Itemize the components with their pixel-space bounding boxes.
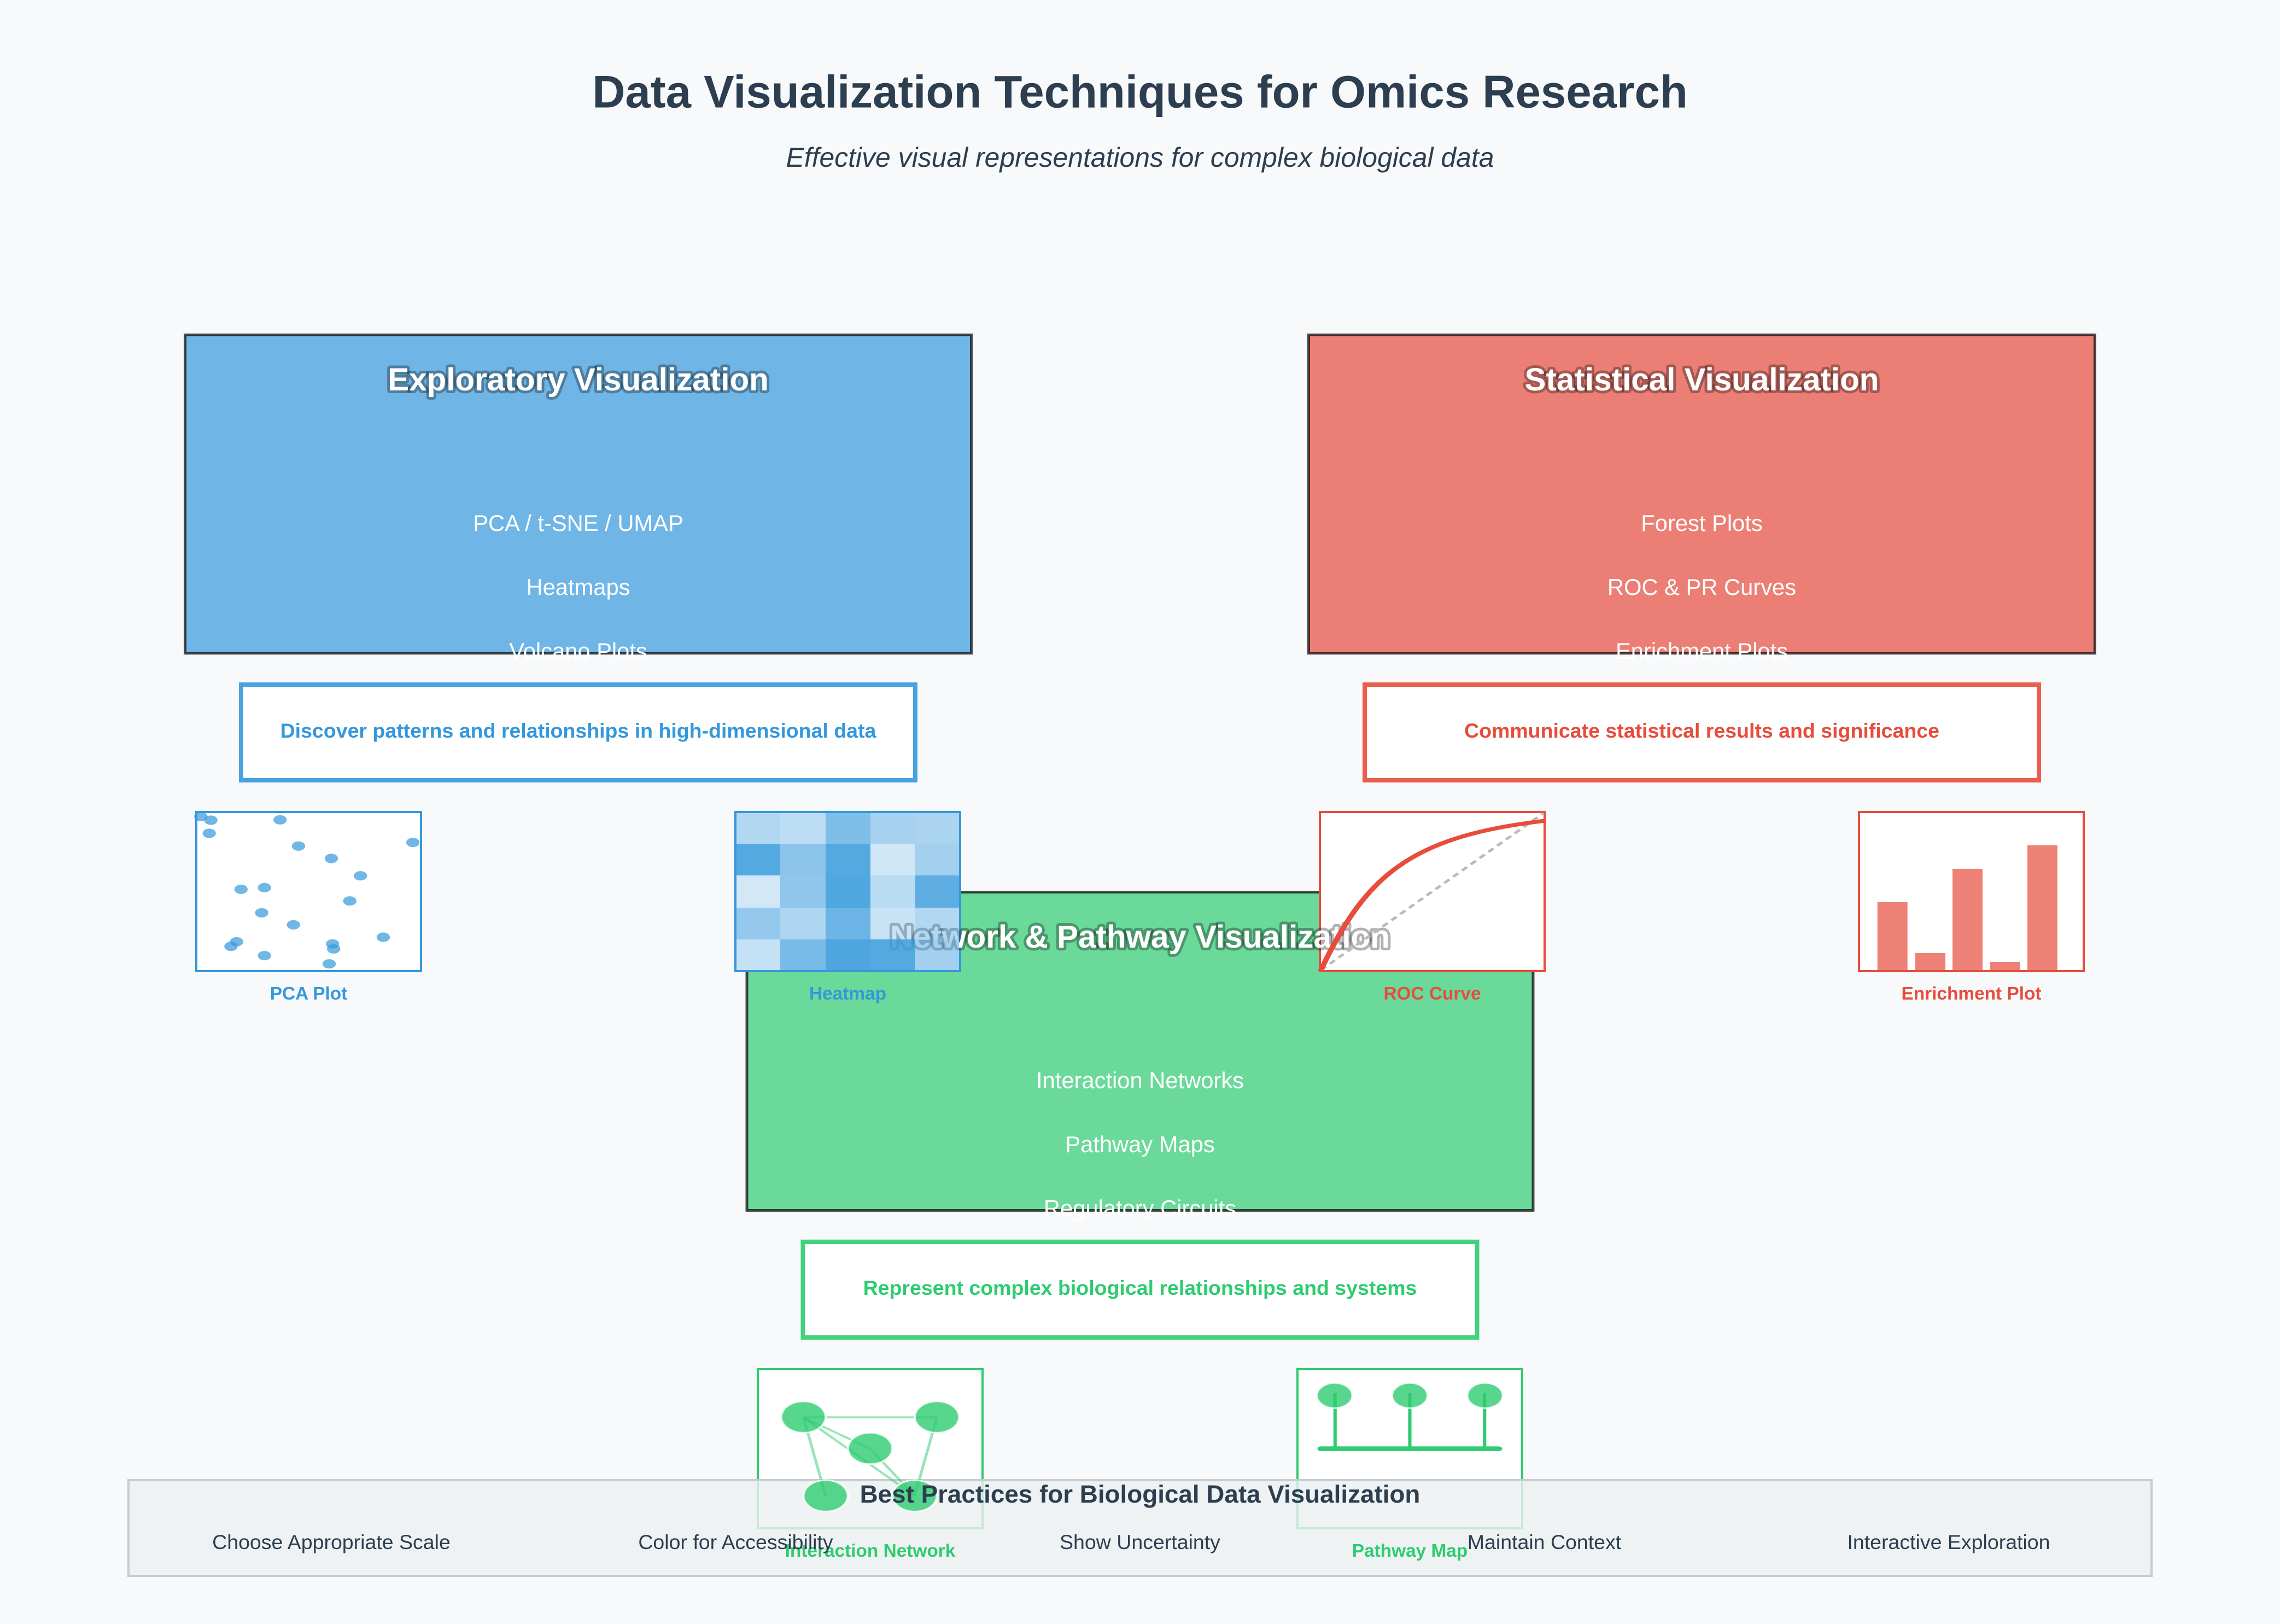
list text: exploratory techniques: Volcano Plots — [509, 638, 647, 664]
panel: exploratory visualization background — [185, 335, 971, 653]
chart: heatmap cells — [736, 813, 959, 970]
label: PCA plot: PCA Plot — [270, 984, 347, 1004]
callout: exploratory purpose — [241, 685, 915, 780]
panel: statistical visualization background — [1309, 335, 2095, 653]
panel: network and pathway visualization background — [747, 892, 1533, 1211]
label: interaction network: Interaction Network — [785, 1541, 956, 1561]
list text: statistical techniques — [1607, 510, 1796, 664]
callout: statistical purpose — [1365, 685, 2039, 780]
chart: ROC curve — [1318, 813, 1546, 971]
heading: exploratory visualization: Exploratory Visualization — [388, 362, 769, 398]
callout: network purpose: Represent complex biological relationships and systems — [863, 1276, 1417, 1299]
list text: statistical techniques: ROC & PR Curves — [1607, 574, 1796, 600]
heading: statistical visualization: Statistical Visualization — [1525, 362, 1879, 398]
callout: exploratory purpose: Discover patterns and relationships in high-dimensional data — [280, 719, 877, 742]
list text: network techniques: Pathway Maps — [1065, 1131, 1215, 1157]
list text: statistical techniques: Forest Plots — [1641, 510, 1763, 536]
heading: best practices: Best Practices for Biological Data Visualization — [860, 1480, 1420, 1508]
chart: PCA scatter — [194, 812, 419, 968]
chart: enrichment bars — [1878, 845, 2057, 970]
list text: network techniques: Interaction Networks — [1036, 1067, 1244, 1093]
heading: network and pathway visualization: Network & Pathway Visualization — [890, 919, 1390, 955]
list text: statistical techniques: Enrichment Plots — [1616, 638, 1788, 664]
frame: PCA plot — [196, 812, 421, 971]
list text: exploratory techniques — [473, 510, 683, 664]
list text: best practices items: Color for Accessibility — [638, 1530, 833, 1553]
label: heatmap: Heatmap — [809, 984, 886, 1004]
frame: ROC curve — [1320, 812, 1545, 971]
frame: enrichment plot — [1859, 812, 2084, 971]
callout: network purpose — [803, 1242, 1477, 1337]
list text: best practices items — [212, 1530, 2050, 1553]
list text: network techniques — [1036, 1067, 1244, 1221]
list text: exploratory techniques: PCA / t-SNE / UMAP — [473, 510, 683, 536]
list text: best practices items: Choose Appropriate Scale — [212, 1530, 451, 1553]
label: pathway map: Pathway Map — [1352, 1541, 1468, 1561]
chart: interaction network — [781, 1401, 959, 1512]
label: enrichment plot: Enrichment Plot — [1901, 984, 2042, 1004]
callout: statistical purpose: Communicate statistical results and significance — [1464, 719, 1939, 742]
list text: best practices items: Show Uncertainty — [1060, 1530, 1220, 1553]
list text: network techniques: Regulatory Circuits — [1044, 1195, 1236, 1221]
title: Data Visualization Techniques for Omics Research — [592, 67, 1688, 117]
list text: best practices items: Maintain Context — [1468, 1530, 1622, 1553]
label: ROC curve: ROC Curve — [1383, 984, 1481, 1004]
panel: best practices background — [128, 1480, 2152, 1576]
frame: pathway map — [1297, 1369, 1522, 1528]
chart: pathway map — [1317, 1383, 1503, 1451]
list text: best practices items: Interactive Exploration — [1847, 1530, 2050, 1553]
list text: exploratory techniques: Heatmaps — [526, 574, 630, 600]
frame: interaction network — [758, 1369, 983, 1528]
subtitle: Effective visual representations for complex biological data — [786, 142, 1494, 173]
frame: heatmap — [735, 812, 960, 971]
